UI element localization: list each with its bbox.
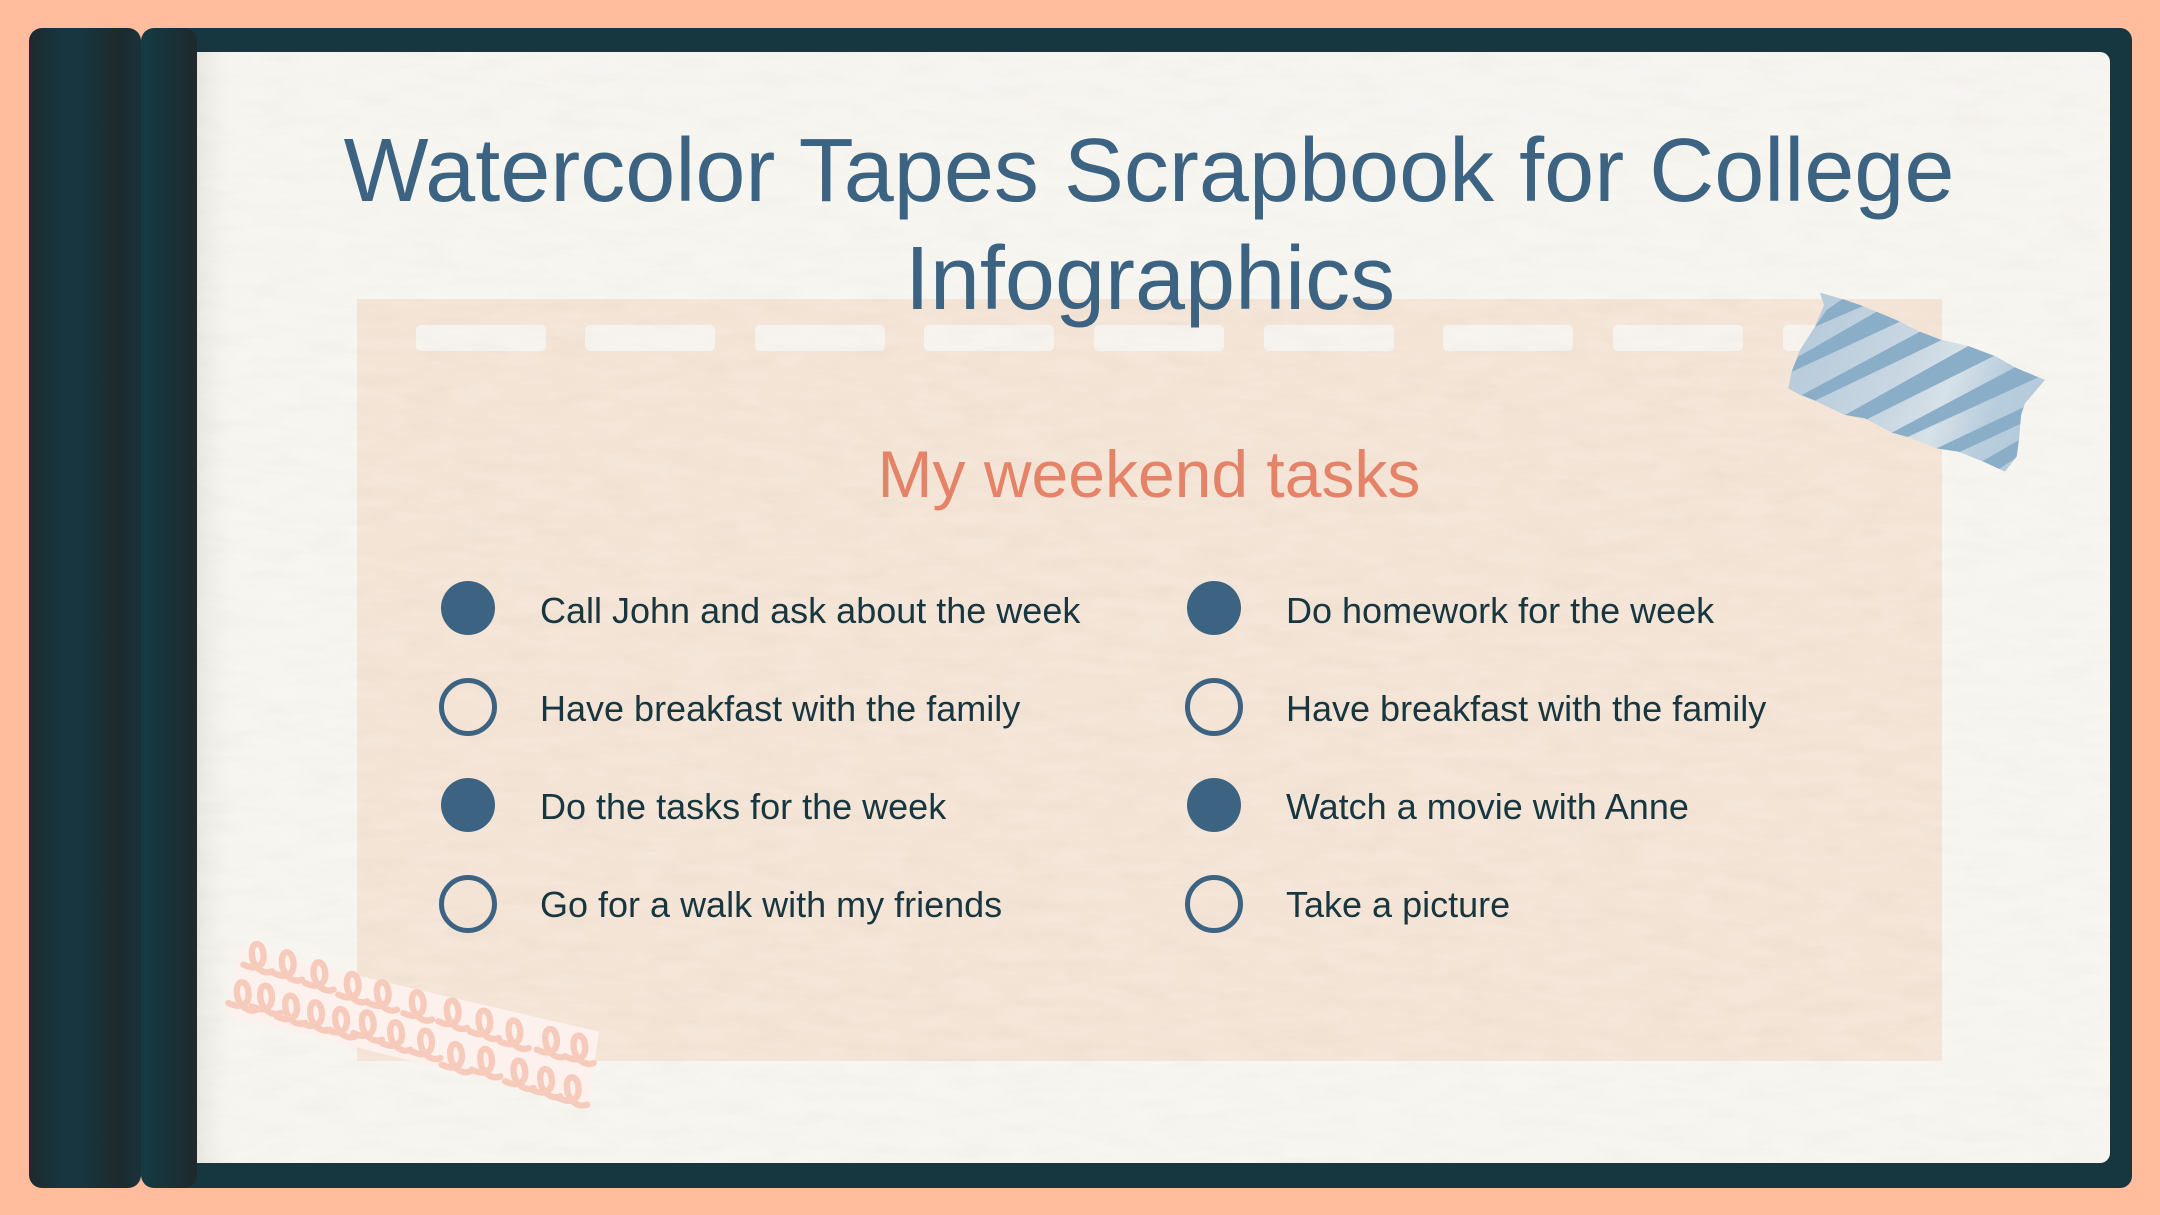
task list: left column (441, 581, 1081, 930)
task 7 (1187, 778, 1689, 832)
dashed stitching strip (416, 325, 1913, 351)
task 4: Go for a walk with my friends (540, 884, 1002, 925)
task 5 (1187, 581, 1715, 635)
task 7: Watch a movie with Anne (1286, 786, 1689, 827)
title: Infographics (905, 229, 1395, 329)
blue striped washi tape (1788, 292, 2045, 472)
subtitle: My weekend tasks (878, 437, 1420, 511)
task 3 (441, 778, 947, 832)
task list: right column (1187, 581, 1766, 930)
task 6 (1188, 680, 1766, 734)
task 6: Have breakfast with the family (1286, 688, 1766, 729)
task 8 (1188, 878, 1510, 930)
task 5: Do homework for the week (1286, 590, 1715, 631)
task 4 (442, 878, 1002, 930)
title: Watercolor Tapes Scrapbook for College (344, 121, 1954, 221)
task 3: Do the tasks for the week (540, 786, 947, 827)
task 2 (442, 680, 1020, 734)
book spine: front fold (141, 28, 197, 1188)
task 1 (441, 581, 1081, 635)
book spine: back fold (29, 28, 141, 1188)
task 8: Take a picture (1286, 884, 1510, 925)
squiggle row 2 (228, 982, 587, 1106)
squiggle row 1 (243, 944, 594, 1064)
title (344, 121, 1954, 329)
pink squiggle washi tape (227, 944, 599, 1106)
panel: tasks background (357, 299, 1942, 1061)
task 2: Have breakfast with the family (540, 688, 1020, 729)
task 1: Call John and ask about the week (540, 590, 1081, 631)
